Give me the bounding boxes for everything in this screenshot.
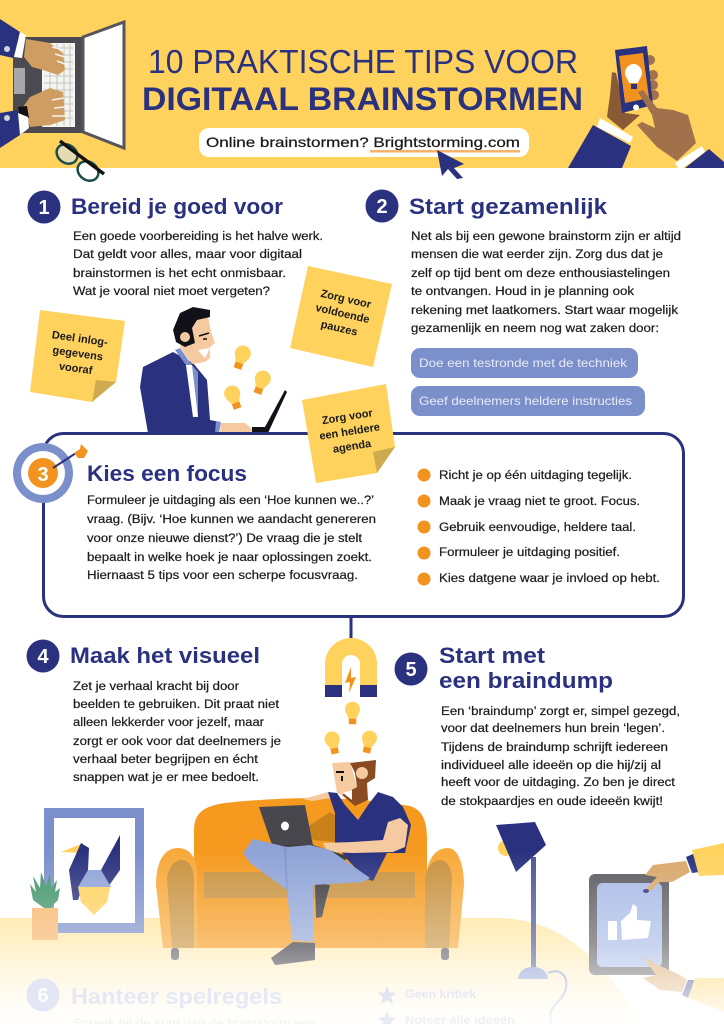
sticky note: pauzes: voldoende bbox=[314, 302, 371, 326]
floor lamp bbox=[496, 822, 566, 1024]
body 2: zelf op tijd bent om deze enthousiastelingen bbox=[411, 268, 670, 280]
sticky note: inloggegevens: Deel inlog- bbox=[51, 329, 109, 349]
body 4: snappen wat je er mee bedoelt. bbox=[73, 772, 259, 784]
heading 5 bbox=[439, 643, 613, 693]
heading 3: Kies een focus bbox=[87, 461, 247, 486]
link pill: Online brainstormen? Brightstorming.com bbox=[206, 134, 520, 150]
body 2: mensen die wat eerder zijn. Zorg dus dat je bbox=[411, 249, 663, 261]
icon: hands with phone bbox=[568, 46, 724, 168]
body 1: Wat je vooral niet moet vergeten? bbox=[73, 286, 270, 298]
tips list bbox=[418, 468, 660, 586]
header banner bbox=[0, 0, 724, 168]
sticky note: agenda: een heldere bbox=[319, 421, 381, 443]
heading 1: Bereid je goed voor bbox=[71, 194, 283, 219]
number badge 2 bbox=[366, 190, 398, 222]
number badge 2: 2 bbox=[376, 196, 388, 218]
floor bbox=[0, 918, 642, 1024]
number badge 4 bbox=[26, 640, 60, 672]
rules list: Geen kritiek bbox=[405, 987, 476, 1001]
target icon 3: 3 bbox=[37, 464, 49, 486]
body 1: Een goede voorbereiding is het halve werk. bbox=[73, 231, 323, 243]
title: DIGITAAL BRAINSTORMEN bbox=[142, 81, 583, 117]
body 4: verhaal beter begrijpen en écht bbox=[73, 754, 259, 766]
number badge 5 bbox=[394, 652, 428, 686]
section 4 bbox=[26, 640, 281, 784]
body 3: vraag. (Bijv. ‘Hoe kunnen we aandacht genereren bbox=[87, 514, 376, 526]
sticky note: pauzes: pauzes bbox=[320, 319, 359, 339]
number badge 1 bbox=[28, 190, 60, 224]
section 1 bbox=[28, 190, 323, 298]
icon: cursor bbox=[437, 150, 464, 179]
sticky note: agenda: agenda bbox=[332, 438, 373, 456]
section 5 bbox=[394, 643, 680, 808]
tips list: Gebruik eenvoudige, heldere taal. bbox=[439, 522, 636, 534]
body 4 bbox=[73, 681, 281, 784]
body 5: Tijdens de braindump schrijft iedereen bbox=[441, 742, 668, 754]
heading 6: Hanteer spelregels bbox=[71, 984, 282, 1009]
body 5 bbox=[441, 706, 680, 808]
body 2: rekening met laatkomers. Start waar mogelijk bbox=[411, 305, 678, 317]
sticky note: inloggegevens: vooraf bbox=[58, 361, 93, 377]
heading 4: Maak het visueel bbox=[70, 643, 260, 668]
bulbs around man bbox=[222, 343, 273, 411]
button: testronde bbox=[411, 348, 638, 378]
body 3 bbox=[87, 495, 376, 582]
sticky note: agenda: Zorg voor bbox=[321, 407, 374, 427]
body 1: brainstormen is het echt onmisbaar. bbox=[73, 268, 286, 280]
section 2 bbox=[366, 190, 681, 416]
body 2: te ontvangen. Houd in je planning ook bbox=[411, 286, 634, 298]
plant bbox=[30, 872, 60, 940]
body 5: Een ‘braindump’ zorgt er, simpel gezegd, bbox=[441, 706, 680, 718]
section 6 (faded) bbox=[26, 978, 515, 1024]
body 5: heeft voor de uitdaging. Zo ben je direct bbox=[441, 777, 676, 789]
heading 5: Start met bbox=[439, 643, 546, 668]
connector line and magnet bbox=[325, 617, 377, 697]
number badge 6 bbox=[26, 978, 60, 1012]
body 2: Net als bij een gewone brainstorm zijn er altijd bbox=[411, 231, 681, 243]
panel: section 3 bbox=[13, 434, 684, 616]
button: testronde: Doe een testronde met de techniek bbox=[419, 356, 628, 370]
body 5: individueel alle ideeën op die hij/zij al bbox=[441, 760, 661, 772]
target icon 3 bbox=[13, 443, 88, 503]
icon: glasses bbox=[53, 140, 104, 185]
tablet with thumbs up and hands bbox=[589, 843, 724, 1012]
sticky note: pauzes: Zorg voor bbox=[319, 288, 373, 311]
heading 2: Start gezamenlijk bbox=[409, 194, 608, 219]
body 3: Hiernaast 5 tips voor een scherpe focusvraag. bbox=[87, 570, 358, 582]
bulbs above head bbox=[323, 702, 378, 755]
framed bird picture bbox=[44, 808, 144, 933]
man on couch bbox=[243, 760, 411, 965]
sticky note: pauzes bbox=[290, 266, 392, 367]
body 5: voor dat deelnemers hun brein ‘legen’. bbox=[441, 723, 665, 735]
number badge 1: 1 bbox=[38, 197, 50, 219]
title bbox=[142, 43, 583, 117]
sticky note: inloggegevens: gegevens bbox=[52, 345, 104, 363]
number badge 5: 5 bbox=[405, 659, 417, 681]
body 1: Dat geldt voor alles, maar voor digitaal bbox=[73, 249, 302, 261]
button: instructies bbox=[411, 386, 645, 416]
button: instructies: Geef deelnemers heldere instructies bbox=[419, 394, 632, 408]
link pill bbox=[199, 128, 529, 157]
tips list: Richt je op één uitdaging tegelijk. bbox=[439, 470, 632, 482]
number badge 6: 6 bbox=[37, 985, 49, 1007]
body 4: Zet je verhaal kracht bij door bbox=[73, 681, 239, 693]
tips list: Formuleer je uitdaging positief. bbox=[439, 547, 620, 559]
body 4: zorgt er ook voor dat deelnemers je bbox=[73, 736, 281, 748]
rules list bbox=[378, 986, 515, 1024]
body 4: beelden te gebruiken. Dit praat niet bbox=[73, 699, 280, 711]
tips list: Maak je vraag niet te groot. Focus. bbox=[439, 496, 640, 508]
body 3: voor onze nieuwe dienst?’) De vraag die je stelt bbox=[87, 533, 363, 545]
number badge 4: 4 bbox=[37, 646, 49, 668]
bottom fade bbox=[0, 850, 724, 1024]
illustration: man with laptop bbox=[140, 307, 287, 433]
title: 10 PRAKTISCHE TIPS VOOR bbox=[148, 43, 578, 80]
couch bbox=[156, 798, 464, 960]
body 5: de stokpaardjes en oude ideeën kwijt! bbox=[441, 796, 663, 808]
sticky note: agenda bbox=[302, 384, 395, 483]
body 2: gezamenlijk en neem nog wat zaken door: bbox=[411, 323, 659, 335]
sticky note: inloggegevens bbox=[30, 310, 125, 402]
body 4: alleen lekkerder voor jezelf, maar bbox=[73, 717, 264, 729]
body 2 bbox=[411, 231, 681, 335]
body 3: Formuleer je uitdaging als een ‘Hoe kunnen we..?’ bbox=[87, 495, 374, 507]
heading 5: een braindump bbox=[439, 668, 613, 693]
icon: laptop with typing hands bbox=[0, 19, 124, 148]
body 3: bepaalt in welke hoek je naar oplossingen zoekt. bbox=[87, 552, 372, 564]
tips list: Kies datgene waar je invloed op hebt. bbox=[439, 573, 660, 585]
body 1 bbox=[73, 231, 323, 298]
